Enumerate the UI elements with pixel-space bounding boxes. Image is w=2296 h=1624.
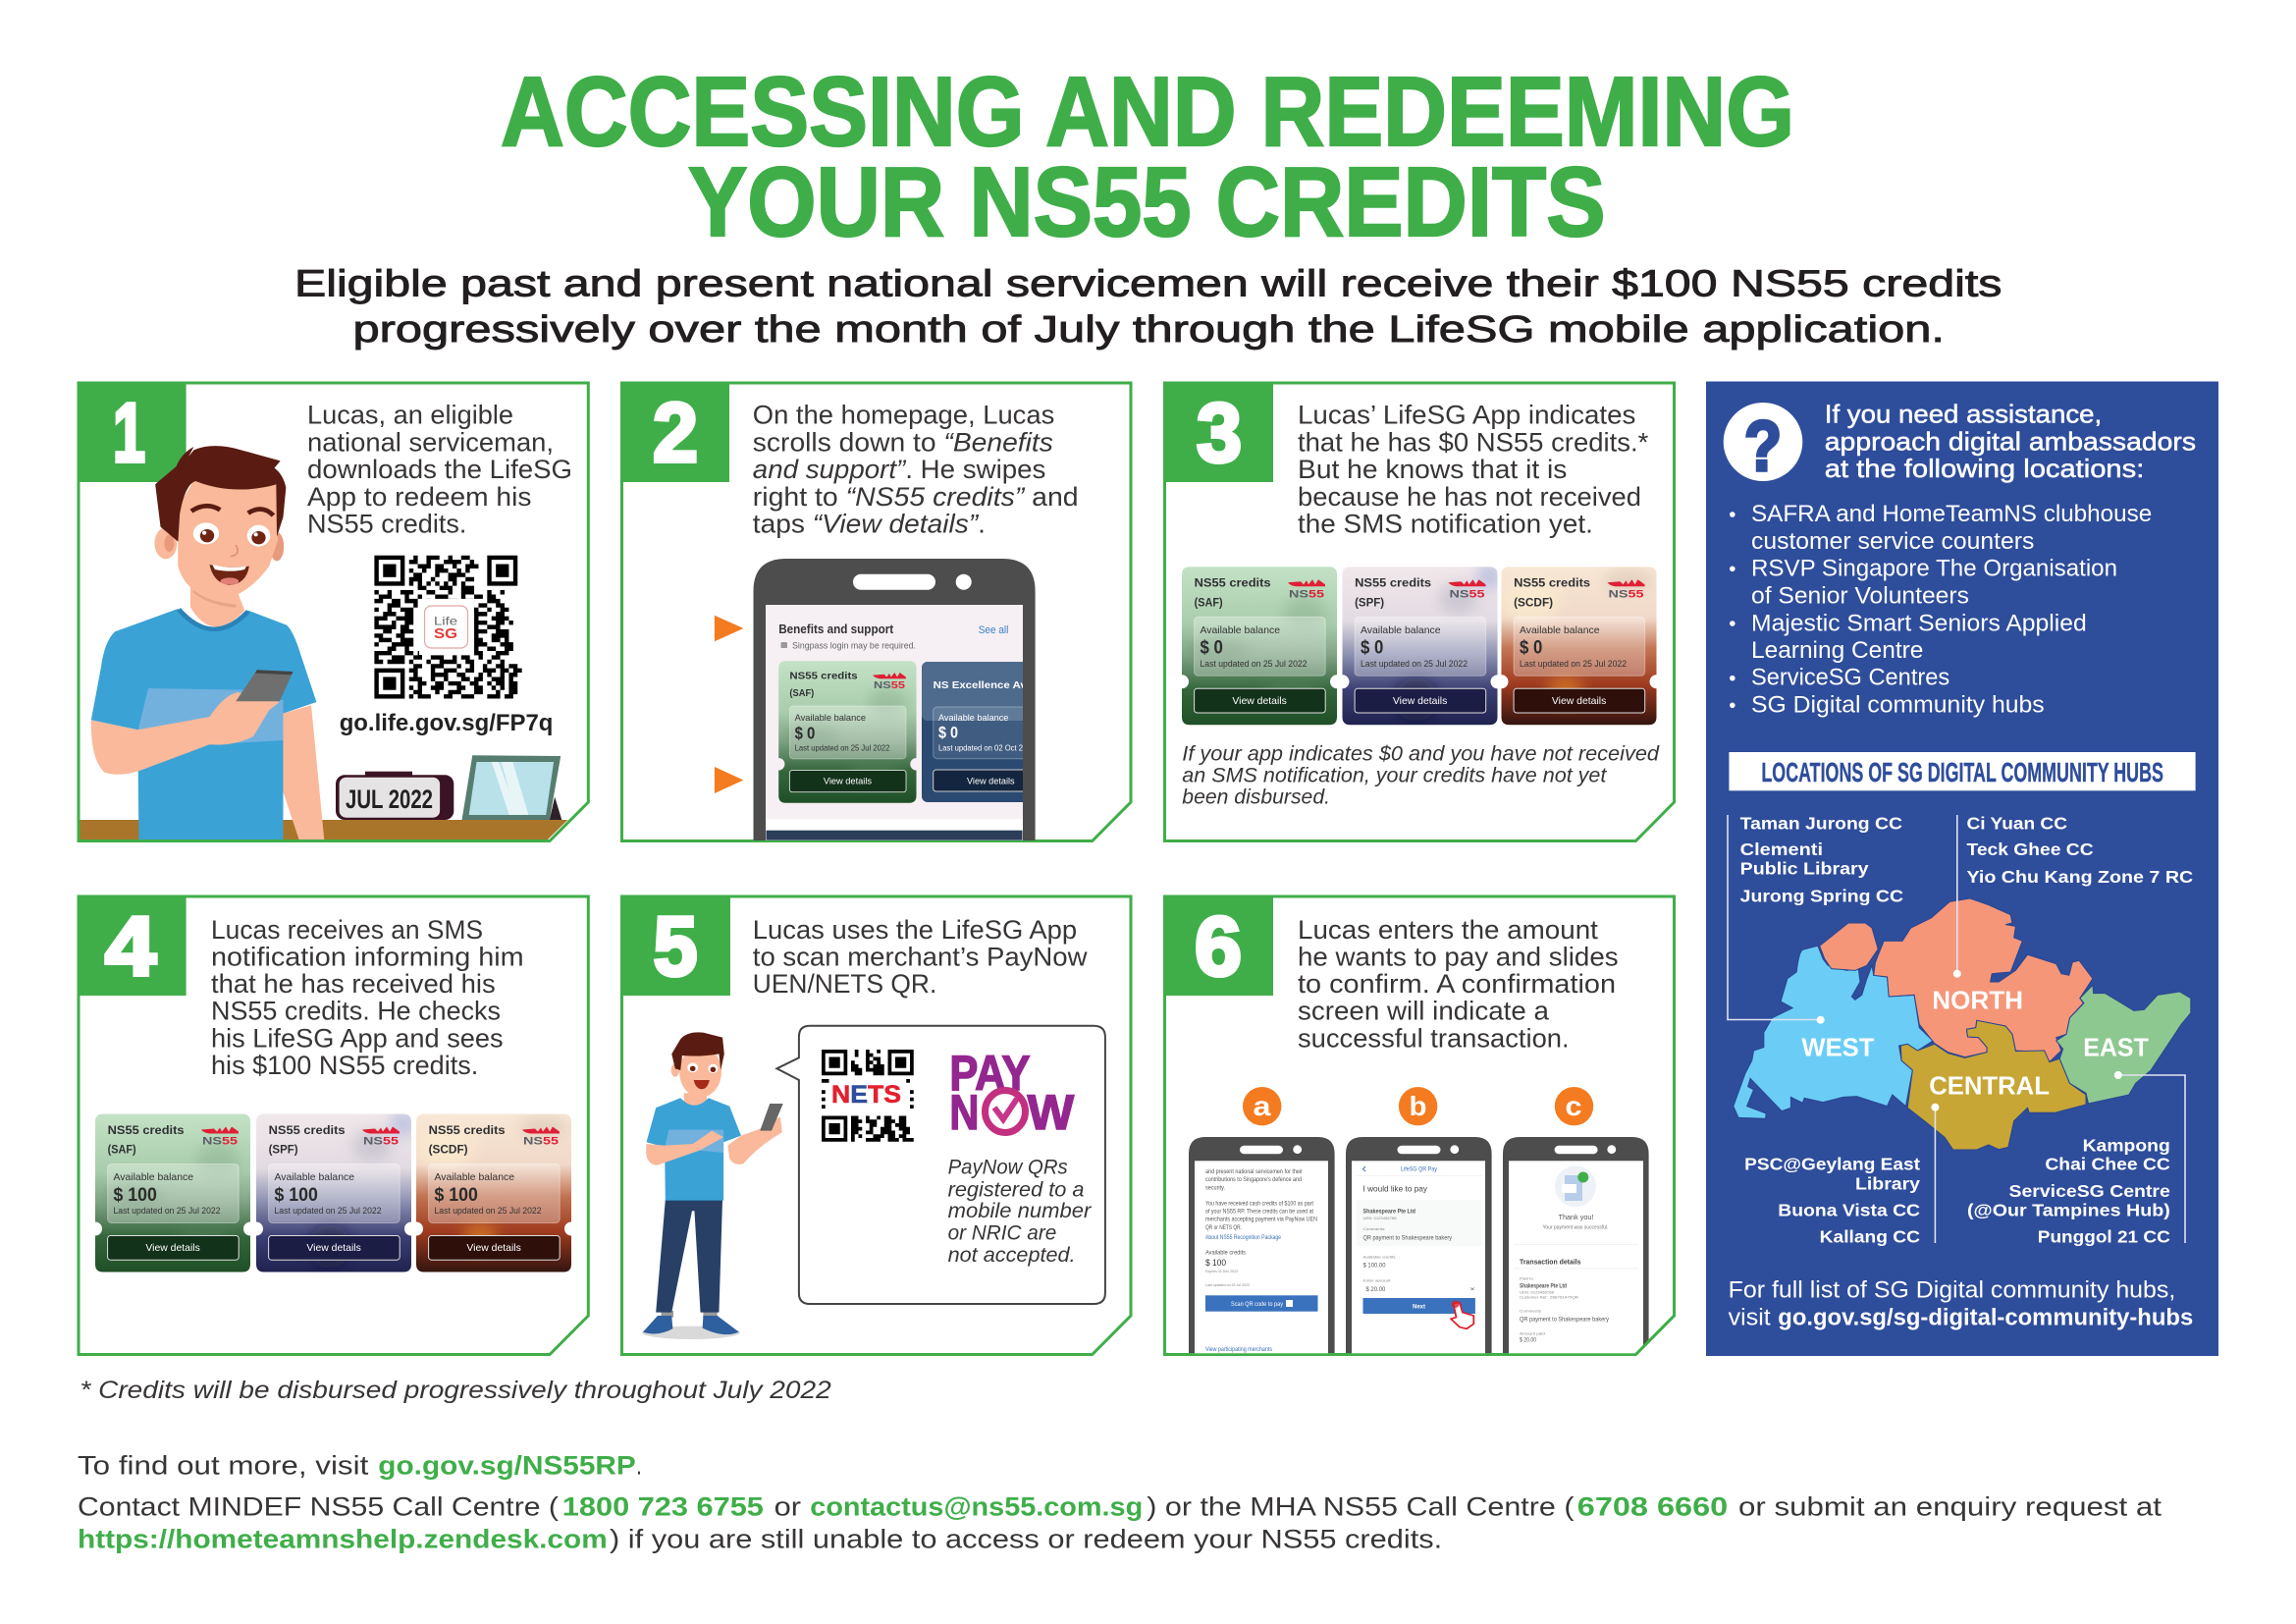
phone a: available credits screen: contributions to Singapore's defence and xyxy=(1205,1177,1302,1183)
card: SCDF $100: NS 55 xyxy=(523,1135,559,1147)
speech bubble xyxy=(776,1026,1105,1304)
illustration: Lucas scanning xyxy=(642,1032,783,1339)
footer: contact details: contactus@ns55.com.sg xyxy=(810,1491,1143,1521)
assistance heading: If you need assistance, xyxy=(1825,400,2102,429)
card: NS55 credits SAF in phone: Available balance xyxy=(795,713,866,723)
footer: find out more xyxy=(78,1451,642,1481)
card: SAF $0: Available balance xyxy=(1200,624,1280,636)
map of Singapore regions: EAST xyxy=(2083,1033,2149,1062)
step 6 text: to confirm. A confirmation xyxy=(1298,969,1616,999)
east hub names: ServiceSG Centre xyxy=(2008,1181,2170,1201)
panel: step 4 xyxy=(78,895,588,1355)
note: PayNow QR restrictions: mobile number xyxy=(948,1200,1092,1222)
step 4 text: NS55 credits. He checks xyxy=(211,997,501,1026)
badge b xyxy=(1399,1087,1437,1125)
card: SAF $100: NS55 credits xyxy=(108,1125,185,1137)
step 4 text xyxy=(211,915,524,1080)
panel: step 5 xyxy=(620,895,1131,1355)
note: PayNow QR restrictions: registered to a xyxy=(948,1178,1084,1201)
west hub names: Taman Jurong CC xyxy=(1740,813,1902,833)
east hub names: Kampong xyxy=(2083,1136,2170,1156)
calendar: JUL 2022: JUL 2022 xyxy=(346,785,433,814)
step 4 text: his LifeSG App and sees xyxy=(211,1024,504,1054)
phone a: available credits screen: You have received cash credits of $100 as part xyxy=(1205,1201,1313,1207)
step 1 text: downloads the LifeSG xyxy=(307,455,572,484)
phone b: enter amount screen: Next xyxy=(1413,1304,1425,1310)
leader line: central hubs xyxy=(1931,1104,1939,1243)
step 1 text xyxy=(307,401,572,538)
arrow: points to View details xyxy=(715,767,744,793)
hubs link note xyxy=(1729,1277,2193,1330)
phone c: payment confirmation screen: Amount paid xyxy=(1520,1330,1545,1335)
card: SPF $0: (SPF) xyxy=(1355,597,1384,609)
panel: step 3 xyxy=(1163,381,1675,840)
phone a: available credits screen: $ 100 xyxy=(1205,1258,1226,1269)
card: SPF $100: NS 55 xyxy=(363,1135,399,1147)
footer: contact details: https://hometeamnshelp.zendesk.com xyxy=(78,1525,608,1554)
card: SCDF $100: View details xyxy=(466,1242,521,1254)
card: SCDF $0: NS 55 xyxy=(1608,588,1643,600)
panel: digital ambassadors assistance xyxy=(1706,381,2218,1356)
card: SAF $100: View details xyxy=(145,1242,200,1254)
step 4 text: his $100 NS55 credits. xyxy=(211,1051,478,1080)
card: SPF $0: View details xyxy=(1393,695,1447,707)
icon: question mark: ? xyxy=(1744,407,1782,486)
footer: find out more: go.gov.sg/NS55RP xyxy=(378,1451,636,1481)
card: SPF $100 xyxy=(256,1110,417,1272)
phone a: available credits screen: merchants accepting payment via PayNow UEN xyxy=(1205,1218,1317,1223)
step 6 text: Lucas enters the amount xyxy=(1298,915,1599,945)
badge a: a xyxy=(1253,1091,1271,1121)
phone: benefits and support screen: Benefits and support xyxy=(778,623,894,636)
hubs link note: go.gov.sg/sg-digital-community-hubs xyxy=(1778,1304,2193,1330)
map of Singapore regions: CENTRAL xyxy=(1929,1070,2050,1100)
phone b: enter amount screen xyxy=(1346,1137,1492,1353)
phone a: available credits screen: About NS55 Recognition Package xyxy=(1205,1235,1282,1241)
step 1 text: national serviceman, xyxy=(307,427,554,457)
step number 6 xyxy=(1163,895,1273,996)
assistance heading xyxy=(1825,400,2196,483)
hubs link note: visit xyxy=(1729,1304,1771,1330)
phone c: payment confirmation screen: UEN: 0123456788 xyxy=(1520,1289,1555,1294)
leader line: west hubs xyxy=(1728,815,1825,1024)
phone b: enter amount screen: $ 100.00 xyxy=(1362,1264,1386,1270)
phone a: available credits screen: Scan QR code to pay xyxy=(1231,1302,1283,1308)
card: NS Excellence Award in phone: NS Excellence Av xyxy=(934,679,1027,691)
logo: PayNow: N xyxy=(949,1085,979,1140)
west hub names: Clementi xyxy=(1740,839,1823,859)
card: SPF $100: View details xyxy=(306,1242,361,1254)
subtitle xyxy=(294,264,2002,351)
phone c: payment confirmation screen: Shakespeare Pte Ltd xyxy=(1520,1284,1567,1290)
footer: contact details: 1800 723 6755 xyxy=(562,1491,764,1521)
step 6 text xyxy=(1298,915,1619,1054)
card: NS Excellence Award in phone: View details xyxy=(967,776,1015,786)
step 5 text: UEN/NETS QR. xyxy=(753,969,936,999)
card: NS55 credits SAF in phone xyxy=(778,661,917,803)
footer: contact details: 6708 6660 xyxy=(1577,1491,1728,1521)
list of assistance locations: RSVP Singapore The Organisation xyxy=(1751,556,2117,582)
card: SPF $0: $ 0 xyxy=(1361,637,1383,659)
note: PayNow QR restrictions: or NRIC are xyxy=(948,1222,1056,1245)
note: $0 explanation xyxy=(1182,742,1660,809)
step number 2 xyxy=(620,381,729,482)
list of assistance locations: SAFRA and HomeTeamNS clubhouse xyxy=(1751,501,2152,527)
note: PayNow QR restrictions xyxy=(948,1157,1092,1267)
step 4 text: that he has received his xyxy=(211,969,496,999)
phone c: payment confirmation screen: QR payment to Shakespeare bakery xyxy=(1520,1317,1609,1323)
step number 4 xyxy=(78,895,187,996)
phone a: available credits screen: Last updated on 25 Jul 2022 xyxy=(1205,1282,1251,1287)
north hub names: Yio Chu Kang Zone 7 RC xyxy=(1967,867,2194,887)
north hub names: Ci Yuan CC xyxy=(1967,813,2067,833)
card: NS55 credits SAF in phone: View details xyxy=(824,777,872,786)
step 5 text: Lucas uses the LifeSG App xyxy=(753,915,1077,945)
card: SCDF $0: NS55 credits xyxy=(1514,578,1590,590)
phone c: payment confirmation screen: Transaction details xyxy=(1520,1259,1581,1266)
phone c: payment confirmation screen: Paid to xyxy=(1520,1276,1534,1281)
phone b: enter amount screen: × xyxy=(1470,1287,1475,1293)
QR code: NETS: NETS xyxy=(831,1081,901,1109)
west hub names xyxy=(1740,813,1903,905)
leader line: east hubs xyxy=(2114,1071,2185,1243)
list of assistance locations: of Senior Volunteers xyxy=(1751,582,1969,609)
map of Singapore regions: NORTH xyxy=(1932,986,2023,1015)
card: SCDF $0: View details xyxy=(1552,695,1606,707)
central hub names: Kallang CC xyxy=(1820,1227,1920,1247)
step 5 text: to scan merchant’s PayNow xyxy=(753,942,1088,971)
west hub names: Public Library xyxy=(1740,859,1869,879)
card: SAF $100: (SAF) xyxy=(108,1145,136,1157)
card: SPF $100: Available balance xyxy=(275,1171,354,1183)
card: SAF $0: View details xyxy=(1232,695,1287,707)
phone a: available credits screen: QR or NETS QR. xyxy=(1205,1225,1242,1231)
step 2 text: and support”. He swipes xyxy=(753,455,1045,484)
step 2 text: On the homepage, Lucas xyxy=(753,401,1054,430)
note: $0 explanation: been disbursed. xyxy=(1182,786,1330,809)
card: NS Excellence Award in phone xyxy=(922,662,1023,802)
phone b: enter amount screen: I would like to pay xyxy=(1362,1183,1428,1193)
card: NS Excellence Award in phone: Last updated on 02 Oct 2 xyxy=(938,743,1024,752)
badge b: b xyxy=(1410,1091,1427,1121)
footer: find out more: To find out more, visit xyxy=(78,1451,369,1481)
card: SPF $100: NS55 credits xyxy=(269,1125,346,1137)
step 3 text: the SMS notification yet. xyxy=(1298,509,1593,538)
card: SPF $0: Last updated on 25 Jul 2022 xyxy=(1361,659,1468,669)
icon: tapping hand cursor xyxy=(1451,1301,1473,1328)
tablet xyxy=(462,755,561,820)
note: PayNow QR restrictions: not accepted. xyxy=(948,1244,1076,1267)
note: $0 explanation: If your app indicates $0 and you have not received xyxy=(1182,742,1660,765)
step 1 text: Lucas, an eligible xyxy=(307,401,513,430)
map of Singapore regions xyxy=(1734,898,2191,1150)
central hub names: PSC@Geylang East xyxy=(1744,1155,1920,1174)
step 1 text: App to redeem his xyxy=(307,482,531,512)
phone b: enter amount screen: $ 20.00 xyxy=(1365,1287,1386,1293)
badge a xyxy=(1243,1087,1281,1125)
step number 6: 6 xyxy=(1195,900,1242,994)
footnote: * Credits will be disbursed progressively throughout July 2022 xyxy=(80,1377,831,1404)
phone a: available credits screen: View participating merchants xyxy=(1205,1347,1272,1353)
step number 2: 2 xyxy=(653,387,698,480)
west hub names: Jurong Spring CC xyxy=(1740,886,1903,905)
east hub names: Chai Chee CC xyxy=(2045,1155,2170,1174)
north hub names xyxy=(1967,813,2194,887)
step 3 text: Lucas’ LifeSG App indicates xyxy=(1298,401,1635,430)
card: SPF $0: Available balance xyxy=(1361,624,1441,636)
assistance heading: approach digital ambassadors xyxy=(1825,426,2196,456)
footer: contact details: ) if you are still unable to access or redeem your NS55 credits. xyxy=(610,1525,1442,1554)
card: SCDF $100 xyxy=(416,1113,571,1272)
card: SAF $0: (SAF) xyxy=(1195,597,1223,609)
card: SCDF $100: $ 100 xyxy=(434,1184,478,1206)
QR code: LifeSG download xyxy=(374,558,522,696)
step number 3 xyxy=(1163,381,1273,482)
footer: find out more: . xyxy=(636,1451,642,1481)
title xyxy=(501,57,1794,257)
central hub names: Library xyxy=(1855,1174,1920,1194)
list of assistance locations: SG Digital community hubs xyxy=(1751,692,2045,719)
phone a: available credits screen: security. xyxy=(1205,1185,1225,1191)
list of assistance locations: customer service counters xyxy=(1751,528,2034,555)
east hub names xyxy=(1967,1136,2170,1247)
phone b: enter amount screen: Available credits xyxy=(1362,1255,1396,1260)
step 3 text: that he has $0 NS55 credits.* xyxy=(1298,427,1648,457)
card: SCDF $0: Available balance xyxy=(1520,624,1600,636)
phone b: enter amount screen: QR payment to Shakespeare bakery xyxy=(1362,1235,1452,1241)
calendar: JUL 2022 xyxy=(336,772,454,820)
card: SPF $100: (SPF) xyxy=(269,1145,298,1157)
card: SAF $0: NS 55 xyxy=(1289,588,1324,600)
step 1 text: NS55 credits. xyxy=(307,509,466,538)
badge c xyxy=(1555,1087,1593,1125)
list of assistance locations: Learning Centre xyxy=(1751,637,1923,664)
step number 5 xyxy=(620,895,730,996)
card: SCDF $0 xyxy=(1502,567,1657,725)
phone a: available credits screen: Available credits xyxy=(1205,1250,1246,1256)
arrow: points to Benefits and support xyxy=(715,616,744,641)
map of Singapore regions: WEST xyxy=(1801,1033,1875,1062)
note: PayNow QR restrictions: PayNow QRs xyxy=(948,1157,1068,1179)
badge c: c xyxy=(1565,1091,1582,1121)
phone a: available credits screen xyxy=(1189,1137,1335,1353)
card: SCDF $0: (SCDF) xyxy=(1514,597,1553,609)
card: NS55 credits SAF in phone: Last updated on 25 Jul 2022 xyxy=(795,743,889,753)
list of assistance locations: Majestic Smart Seniors Applied xyxy=(1751,610,2087,636)
card: NS55 credits SAF in phone: NS 55 xyxy=(874,680,906,691)
logo: PayNow xyxy=(949,1046,1075,1140)
step 2 text: scrolls down to “Benefits xyxy=(753,427,1053,457)
card: SAF $100: Last updated on 25 Jul 2022 xyxy=(114,1206,221,1216)
card: SCDF $0: Last updated on 25 Jul 2022 xyxy=(1520,659,1627,669)
step number 5: 5 xyxy=(654,900,697,994)
subtitle: Eligible past and present national servicemen will receive their $100 NS55 credits xyxy=(294,264,2002,305)
link: go.life.gov.sg/FP7q: go.life.gov.sg/FP7q xyxy=(340,710,553,736)
card: SCDF $100: Available balance xyxy=(434,1171,514,1183)
phone a: available credits screen: of your NS55 RP. These credits can be used at xyxy=(1205,1210,1313,1216)
phone: benefits and support screen: Singpass login may be required. xyxy=(792,641,916,652)
phone b: enter amount screen: Enter amount xyxy=(1362,1277,1392,1282)
phone c: payment confirmation screen: Customer Ref.: 658761470QR xyxy=(1520,1295,1578,1300)
phone b: enter amount screen: UEN: 0123456788 xyxy=(1362,1216,1397,1220)
card: SPF $100: $ 100 xyxy=(275,1184,318,1206)
card: SAF $0: Last updated on 25 Jul 2022 xyxy=(1200,659,1308,669)
heading: locations of SG Digital community hubs xyxy=(1729,752,2196,790)
panel: step 6 xyxy=(1163,895,1675,1355)
card: SAF $0: NS55 credits xyxy=(1195,578,1271,590)
phone c: payment confirmation screen: Thank you! xyxy=(1559,1213,1594,1221)
card: SAF $100: Available balance xyxy=(114,1171,193,1183)
panel: step 1 xyxy=(78,381,588,840)
card: SPF $0: NS55 credits xyxy=(1355,578,1431,590)
card: SCDF $100: (SCDF) xyxy=(429,1145,468,1157)
card: SCDF $100: NS55 credits xyxy=(429,1125,506,1137)
panel: step 2 xyxy=(620,381,1131,840)
phone b: enter amount screen: Shakespeare Pte Ltd xyxy=(1362,1209,1415,1215)
step 6 text: he wants to pay and slides xyxy=(1298,942,1619,971)
phone c: payment confirmation screen: Your payment was successful. xyxy=(1543,1225,1608,1231)
assistance heading: at the following locations: xyxy=(1825,454,2144,483)
step number 1 xyxy=(78,381,187,482)
phone c: payment confirmation screen: $ 20.00 xyxy=(1520,1338,1537,1344)
phone b: enter amount screen: Comments xyxy=(1362,1226,1384,1231)
card: NS55 credits SAF in phone: NS55 credits xyxy=(789,672,858,682)
hubs link note: For full list of SG Digital community hubs, xyxy=(1729,1277,2175,1304)
icon: question mark xyxy=(1724,403,1802,486)
north hub names: Teck Ghee CC xyxy=(1967,839,2094,859)
footer: contact details: Contact MINDEF NS55 Call Centre ( xyxy=(78,1491,559,1521)
card: SCDF $100: Last updated on 25 Jul 2022 xyxy=(434,1206,542,1216)
step 3 text xyxy=(1298,401,1648,538)
card: SAF $0 xyxy=(1182,567,1337,725)
phone: benefits and support screen: See all xyxy=(979,624,1008,636)
list of assistance locations xyxy=(1730,501,2152,719)
title: YOUR NS55 CREDITS xyxy=(688,147,1606,257)
step 2 text: right to “NS55 credits” and xyxy=(753,482,1079,512)
card: SCDF $0: $ 0 xyxy=(1520,637,1542,659)
step 4 text: Lucas receives an SMS xyxy=(211,915,483,945)
east hub names: (@Our Tampines Hub) xyxy=(1967,1200,2170,1219)
logo: PayNow: PAY xyxy=(949,1046,1030,1101)
phone a: available credits screen: and present national servicemen for their xyxy=(1205,1169,1303,1175)
footer: contact details: ) or the MHA NS55 Call Centre ( xyxy=(1147,1491,1575,1521)
step 5 text xyxy=(753,915,1088,999)
step 6 text: successful transaction. xyxy=(1298,1024,1570,1054)
footer: contact details: or submit an enquiry request at xyxy=(1738,1491,2163,1521)
phone b: enter amount screen: LifeSG QR Pay xyxy=(1401,1166,1437,1172)
illustration: Lucas with phone xyxy=(80,446,567,839)
note: $0 explanation: an SMS notification, your credits have not yet xyxy=(1182,765,1608,787)
phone c: payment confirmation screen xyxy=(1503,1137,1649,1353)
card: NS Excellence Award in phone: Available balance xyxy=(938,713,1008,724)
phone a: available credits screen: Expires 31 Dec 2023 xyxy=(1205,1269,1239,1273)
QR code: LifeSG download: SG xyxy=(434,625,457,642)
step number 4: 4 xyxy=(105,900,156,994)
leader line: north hubs xyxy=(1953,815,1961,978)
central hub names xyxy=(1744,1155,1920,1247)
step number 1: 1 xyxy=(113,387,145,480)
phone c: payment confirmation screen: Comments xyxy=(1520,1309,1541,1314)
phone: benefits and support screen xyxy=(754,559,1049,840)
card: NS Excellence Award in phone: $ 0 xyxy=(938,724,958,742)
QR code: NETS xyxy=(822,1052,914,1140)
list of assistance locations: ServiceSG Centres xyxy=(1751,665,1949,691)
card: SAF $0: $ 0 xyxy=(1200,637,1223,659)
east hub names: Punggol 21 CC xyxy=(2038,1227,2170,1247)
step 3 text: But he knows that it is xyxy=(1298,455,1567,484)
step 2 text xyxy=(753,401,1079,538)
logo: PayNow: W xyxy=(1028,1085,1075,1140)
step 2 text: taps “View details” . xyxy=(753,509,986,538)
step 3 text: because he has not received xyxy=(1298,482,1641,512)
card: SAF $100: $ 100 xyxy=(114,1184,157,1206)
card: SPF $0 xyxy=(1343,563,1504,725)
central hub names: Buona Vista CC xyxy=(1778,1200,1920,1219)
card: NS55 credits SAF in phone: $ 0 xyxy=(795,724,815,743)
card: SPF $0: NS 55 xyxy=(1449,588,1484,600)
title: ACCESSING AND REDEEMING xyxy=(501,57,1794,167)
footer: contact details: or xyxy=(774,1491,801,1521)
step number 3: 3 xyxy=(1197,387,1242,480)
card: SAF $100 xyxy=(95,1113,250,1272)
QR code: LifeSG download: Life xyxy=(434,615,457,628)
card: SAF $100: NS 55 xyxy=(202,1135,238,1147)
footer: contact details xyxy=(78,1491,2163,1554)
subtitle: progressively over the month of July through the LifeSG mobile application. xyxy=(353,309,1945,351)
step 6 text: screen will indicate a xyxy=(1298,997,1549,1026)
card: SPF $100: Last updated on 25 Jul 2022 xyxy=(275,1206,382,1216)
card: NS55 credits SAF in phone: (SAF) xyxy=(789,688,814,699)
step 4 text: notification informing him xyxy=(211,942,524,971)
